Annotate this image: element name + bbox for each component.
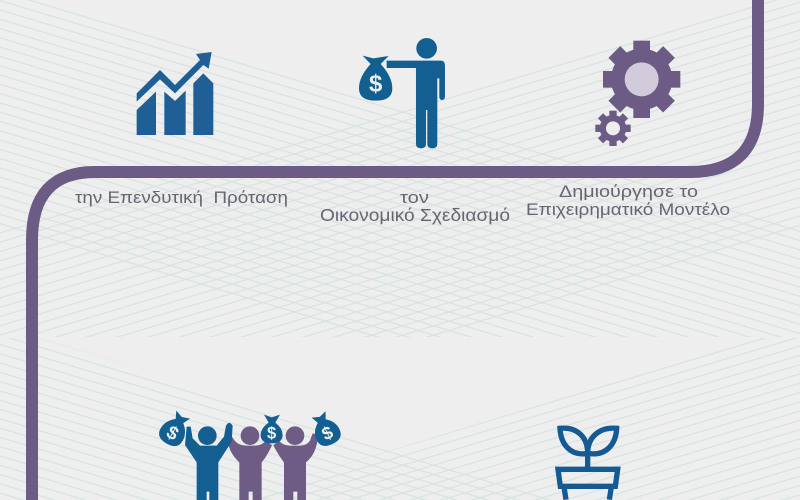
step label: investment proposal: την Επενδυτική Πρόταση	[75, 188, 288, 207]
step label: business model: Επιχειρηματικό Μοντέλο	[526, 200, 730, 219]
blue person	[185, 423, 233, 500]
step label: business model	[526, 182, 730, 219]
money bags: $	[319, 422, 336, 444]
step label: financial planning: τον	[400, 188, 429, 207]
icon: growth chart	[137, 52, 213, 135]
icon: person holding money bag: $	[369, 71, 382, 98]
step label: financial planning: Οικονομικό Σχεδιασμό	[320, 205, 510, 225]
icon: people with money bags	[156, 408, 344, 500]
money bags: $	[267, 424, 277, 443]
icon: person holding money bag	[359, 38, 445, 148]
purple people	[227, 426, 318, 500]
icon: gears	[595, 41, 680, 146]
money bags	[156, 408, 344, 450]
step label: financial planning	[320, 188, 510, 225]
step label: business model: Δημιούργησε το	[559, 182, 698, 201]
money bags: $	[163, 421, 183, 445]
icon: potted plant	[558, 428, 618, 500]
